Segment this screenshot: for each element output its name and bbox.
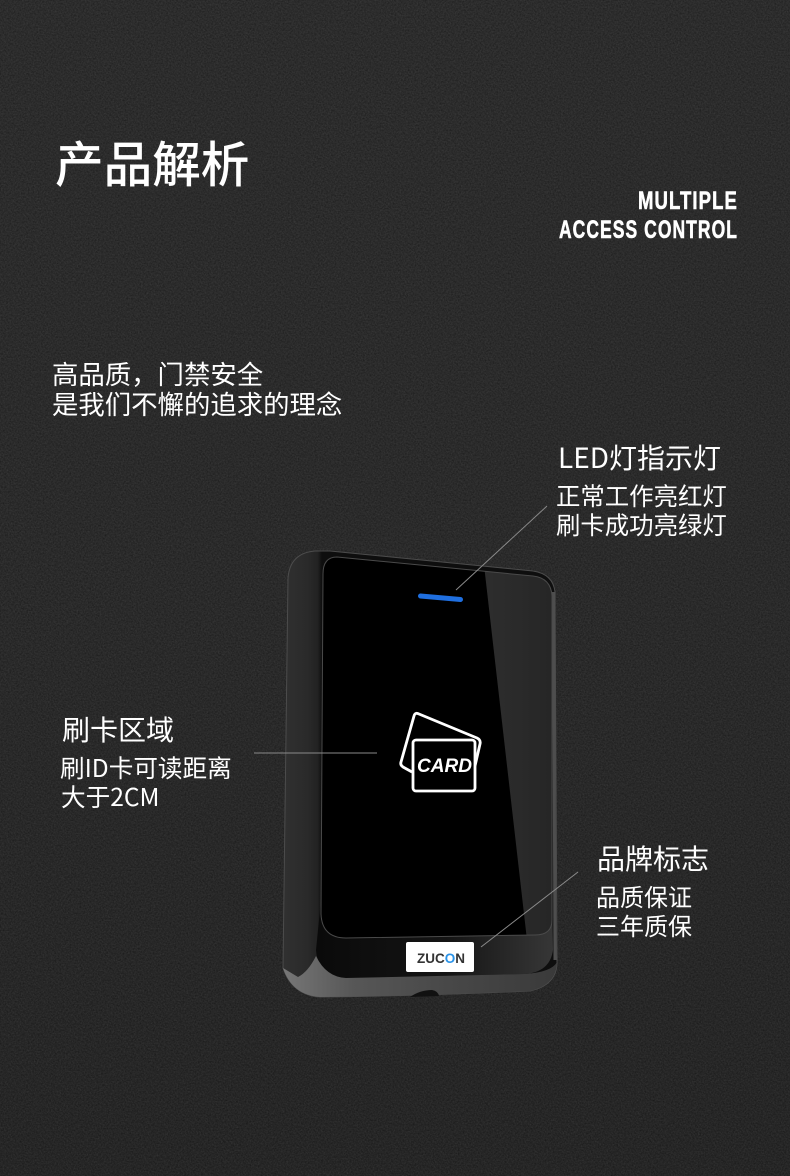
- callout: card swipe area: 刷ID卡可读距离: [60, 749, 232, 785]
- subtitle: multiple access control: MULTIPLE: [638, 187, 738, 215]
- callout: brand logo: 品质保证: [596, 878, 692, 913]
- brand badge: ZUCON: [417, 951, 465, 966]
- callout: LED indicator: [556, 437, 727, 542]
- callout: card swipe area: 刷卡区域: [62, 709, 174, 749]
- intro text: 高品质，门禁安全: [52, 353, 263, 392]
- intro text: 是我们不懈的追求的理念: [52, 383, 342, 422]
- front glass: [315, 550, 560, 945]
- callout: LED indicator: 正常工作亮红灯: [556, 478, 727, 513]
- right edge highlight: [554, 592, 555, 960]
- callout: card swipe area: [60, 709, 232, 814]
- callout: LED indicator: LED灯指示灯: [558, 437, 721, 477]
- bottom notch: [410, 990, 439, 997]
- card icon: CARD: [417, 756, 472, 777]
- callout: brand logo: [596, 838, 709, 942]
- card icon: [401, 713, 480, 791]
- callout: LED indicator: 刷卡成功亮绿灯: [556, 507, 727, 542]
- title: 产品解析: [55, 126, 249, 196]
- callout: brand logo: 三年质保: [596, 907, 692, 942]
- device: card reader: [283, 550, 560, 997]
- lower bezel: [316, 900, 553, 978]
- leader line: LED: [456, 506, 547, 590]
- device body: [283, 551, 557, 997]
- subtitle: multiple access control: [559, 187, 738, 244]
- callout: card swipe area: 大于2CM: [61, 778, 160, 814]
- bottom face highlight: [283, 956, 557, 997]
- LED indicator: [420, 596, 460, 600]
- glass outline: [321, 557, 552, 938]
- leader line: brand: [481, 872, 578, 947]
- intro text: [52, 353, 342, 422]
- leader line: card area: [254, 752, 377, 754]
- brand badge: [406, 942, 474, 972]
- callout: brand logo: 品牌标志: [597, 838, 709, 878]
